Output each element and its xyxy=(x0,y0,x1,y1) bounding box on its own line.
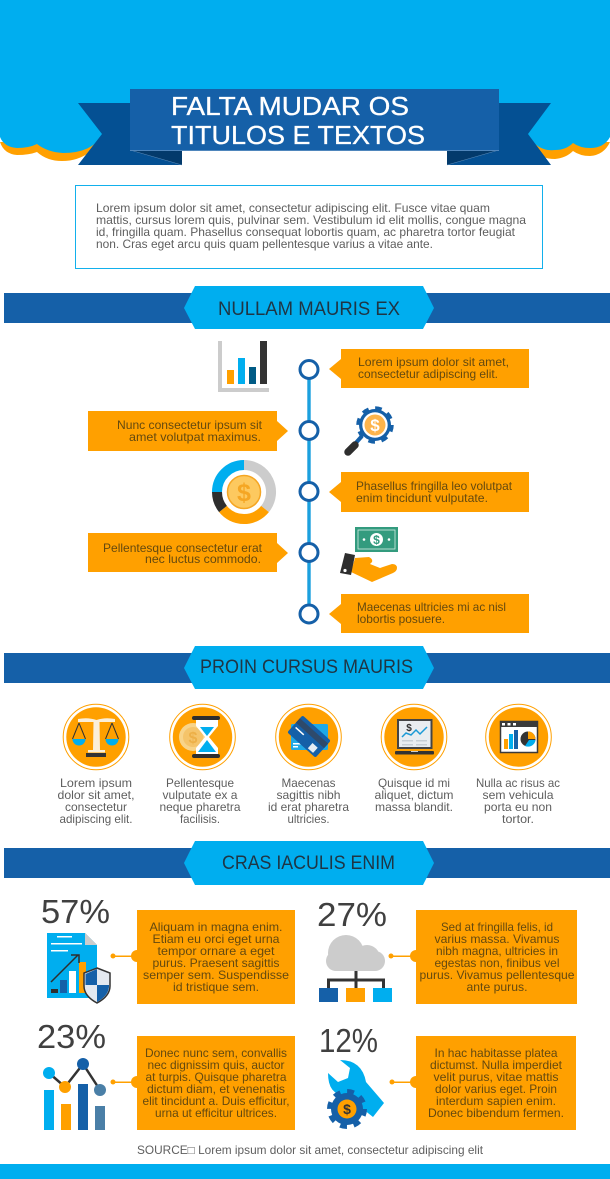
feature text: credit cards: id erat pharetra xyxy=(268,800,349,814)
stat: 27%: 27% xyxy=(317,896,387,933)
title xyxy=(171,91,425,150)
feature text: hourglass: Pellentesque xyxy=(166,776,234,790)
intro text box: non. Cras eget arcu quis quam pellentesque varius a vitae ante. xyxy=(96,237,433,251)
feature text: credit cards: Maecenas xyxy=(282,776,336,790)
feature text: laptop: massa blandit. xyxy=(375,800,453,814)
feature text: dashboard: porta eu non xyxy=(484,800,552,814)
feature: scales xyxy=(63,704,129,770)
feature text: scales xyxy=(58,776,134,826)
callout: 12% xyxy=(390,1036,576,1130)
icon: bars and line chart xyxy=(43,1058,106,1130)
callout: 27%: nibh magna, ultricies in xyxy=(436,944,558,958)
feature text: credit cards xyxy=(268,776,349,826)
callout: 12%: dolor varius eget. Proin xyxy=(435,1082,557,1096)
stat: 27% xyxy=(317,896,392,1002)
feature text: laptop: Quisque id mi xyxy=(378,776,450,790)
section header: Nullam Mauris Ex xyxy=(4,286,610,329)
feature text: hourglass: neque pharetra xyxy=(160,800,241,814)
feature text: scales: adipiscing elit. xyxy=(60,812,132,826)
icon: document with chart and shield xyxy=(47,933,110,1003)
callout: 23%: at turpis. Quisque pharetra xyxy=(146,1070,287,1084)
callout: 57%: tempor ornare a eget xyxy=(158,944,275,958)
callout: 57% xyxy=(110,910,295,1004)
callout: 12%: velit purus, vitae mattis xyxy=(434,1070,559,1084)
feature text: credit cards: ultricies. xyxy=(288,812,330,826)
timeline xyxy=(300,360,318,623)
callout: timeline 2: amet volutpat maximus. xyxy=(129,430,261,444)
intro text box xyxy=(76,186,542,268)
callout: 12%: dictumst. Nulla imperdiet xyxy=(430,1058,563,1072)
stat: 23%: 23% xyxy=(37,1018,106,1055)
callout: 12%: Donec bibendum fermen. xyxy=(428,1106,564,1120)
callout: timeline 3: enim tincidunt vulputate. xyxy=(356,491,488,505)
title: FALTA MUDAR OS xyxy=(171,91,409,121)
callout: 57%: Etiam eu orci eget urna xyxy=(152,932,280,946)
icon: credit cards xyxy=(287,715,331,758)
callout: 57%: id tristique sem. xyxy=(173,980,259,994)
callout: 23%: nec dignissim quis, auctor xyxy=(148,1058,285,1072)
icon: cloud network xyxy=(319,935,392,1002)
callout: timeline 4: nec luctus commodo. xyxy=(145,552,261,566)
stat: 57% xyxy=(41,893,110,1003)
icon: donut with coin: $ xyxy=(237,479,251,507)
feature text: dashboard: Nulla ac risus ac xyxy=(476,776,560,790)
feature text: dashboard: tortor. xyxy=(502,812,534,826)
feature: laptop xyxy=(381,704,447,770)
feature text: credit cards: sagittis nibh xyxy=(276,788,340,802)
callout: 23%: dictum diam, et venenatis xyxy=(147,1082,285,1096)
title: TITULOS E TEXTOS xyxy=(171,120,425,150)
feature: hourglass xyxy=(170,704,235,770)
icon: donut with coin xyxy=(217,465,271,519)
feature text: dashboard: sem vehicula xyxy=(482,788,554,802)
callout: timeline 3 xyxy=(329,472,529,512)
section header: Cras Iaculis Enim xyxy=(4,841,610,885)
source line: SOURCE□ Lorem ipsum dolor sit amet, consectetur adipiscing elit xyxy=(137,1143,484,1157)
feature text: laptop xyxy=(374,776,454,814)
title ribbon xyxy=(78,89,551,165)
callout: 27%: varius massa. Vivamus xyxy=(434,932,560,946)
callout: timeline 3: Phasellus fringilla leo volutpat xyxy=(356,479,513,493)
header cloud background xyxy=(0,0,610,161)
feature text: dashboard xyxy=(476,776,560,826)
icon: magnifier gear: $ xyxy=(370,416,380,435)
callout: 27%: purus. Vivamus pellentesque xyxy=(420,968,575,982)
callout: 57%: semper sem. Suspendisse xyxy=(143,968,289,982)
icon: hand with banknote: $ xyxy=(373,533,380,547)
feature text: scales: dolor sit amet, xyxy=(58,788,134,802)
feature text: hourglass: vulputate ex a xyxy=(162,788,238,802)
icon: hand with banknote xyxy=(340,527,398,582)
stat: 57%: 57% xyxy=(41,893,110,930)
callout: 27%: ante purus. xyxy=(466,980,528,994)
callout: timeline 5: Maecenas ultricies mi ac nisl xyxy=(357,600,506,614)
callout: 23%: elit tincidunt a. Duis efficitur, xyxy=(142,1094,290,1108)
section header: Cras Iaculis Enim: CRAS IACULIS ENIM xyxy=(222,853,395,874)
feature text: scales: Lorem ipsum xyxy=(60,776,132,790)
callout: 12%: interdum sapien enim. xyxy=(436,1094,556,1108)
callout: timeline 4 xyxy=(88,533,288,572)
icon: bar chart xyxy=(218,341,269,392)
icon: wrench and gear: $ xyxy=(343,1101,351,1117)
callout: timeline 4: Pellentesque consectetur erat xyxy=(103,541,263,555)
callout: timeline 2: Nunc consectetur ipsum sit xyxy=(117,418,263,432)
callout: timeline 1: consectetur adipiscing elit. xyxy=(358,367,498,381)
feature: credit cards xyxy=(276,704,341,770)
callout: timeline 5: lobortis posuere. xyxy=(357,612,445,626)
stat: 12% xyxy=(319,1022,384,1126)
callout: 57%: Aliquam in magna enim. xyxy=(150,920,282,934)
section header: Proin Cursus Mauris: PROIN CURSUS MAURIS xyxy=(200,657,413,678)
feature text: laptop: aliquet, dictum xyxy=(374,788,454,802)
footer band xyxy=(0,1164,610,1179)
icon: browser dashboard xyxy=(500,721,538,752)
feature text: hourglass xyxy=(160,776,241,826)
callout: 27%: Sed at fringilla felis, id xyxy=(441,920,553,934)
intro text box: Lorem ipsum dolor sit amet, consectetur adipiscing elit. Fusce vitae quam xyxy=(96,201,490,215)
intro text box: mattis, cursus lorem quis, pulvinar sem. Vestibulum id elit mollis, congue magna xyxy=(96,213,526,227)
intro text box: id, fringilla quam. Phasellus consequat lobortis quam, ac pharetra tortor feugiat xyxy=(96,225,516,239)
icon: hourglass and coin: $ xyxy=(189,730,198,747)
section header: Proin Cursus Mauris xyxy=(4,646,610,689)
callout: timeline 2 xyxy=(88,411,288,451)
callout: 23%: urna ut efficitur ultrices. xyxy=(155,1106,277,1120)
icon: laptop chart: $ xyxy=(406,723,412,734)
callout: timeline 5 xyxy=(329,594,529,633)
icon: scales xyxy=(72,718,118,757)
feature text: hourglass: facilisis. xyxy=(180,812,220,826)
callout: 27% xyxy=(388,910,577,1004)
callout: timeline 1: Lorem ipsum dolor sit amet, xyxy=(358,355,509,369)
stat: 23% xyxy=(37,1018,106,1130)
callout: timeline 1 xyxy=(329,349,529,388)
feature: dashboard xyxy=(486,704,551,770)
section header: Nullam Mauris Ex: NULLAM MAURIS EX xyxy=(218,299,400,320)
icon: magnifier gear xyxy=(348,409,391,452)
callout: 23%: Donec nunc sem, convallis xyxy=(145,1046,287,1060)
callout: 27%: egestas non, finibus vel xyxy=(434,956,560,970)
callout: 23% xyxy=(110,1036,295,1130)
callout: 12%: In hac habitasse platea xyxy=(434,1046,558,1060)
stat: 12%: 12% xyxy=(319,1022,378,1059)
callout: 57%: purus. Praesent sagittis xyxy=(152,956,280,970)
feature text: scales: consectetur xyxy=(65,800,127,814)
